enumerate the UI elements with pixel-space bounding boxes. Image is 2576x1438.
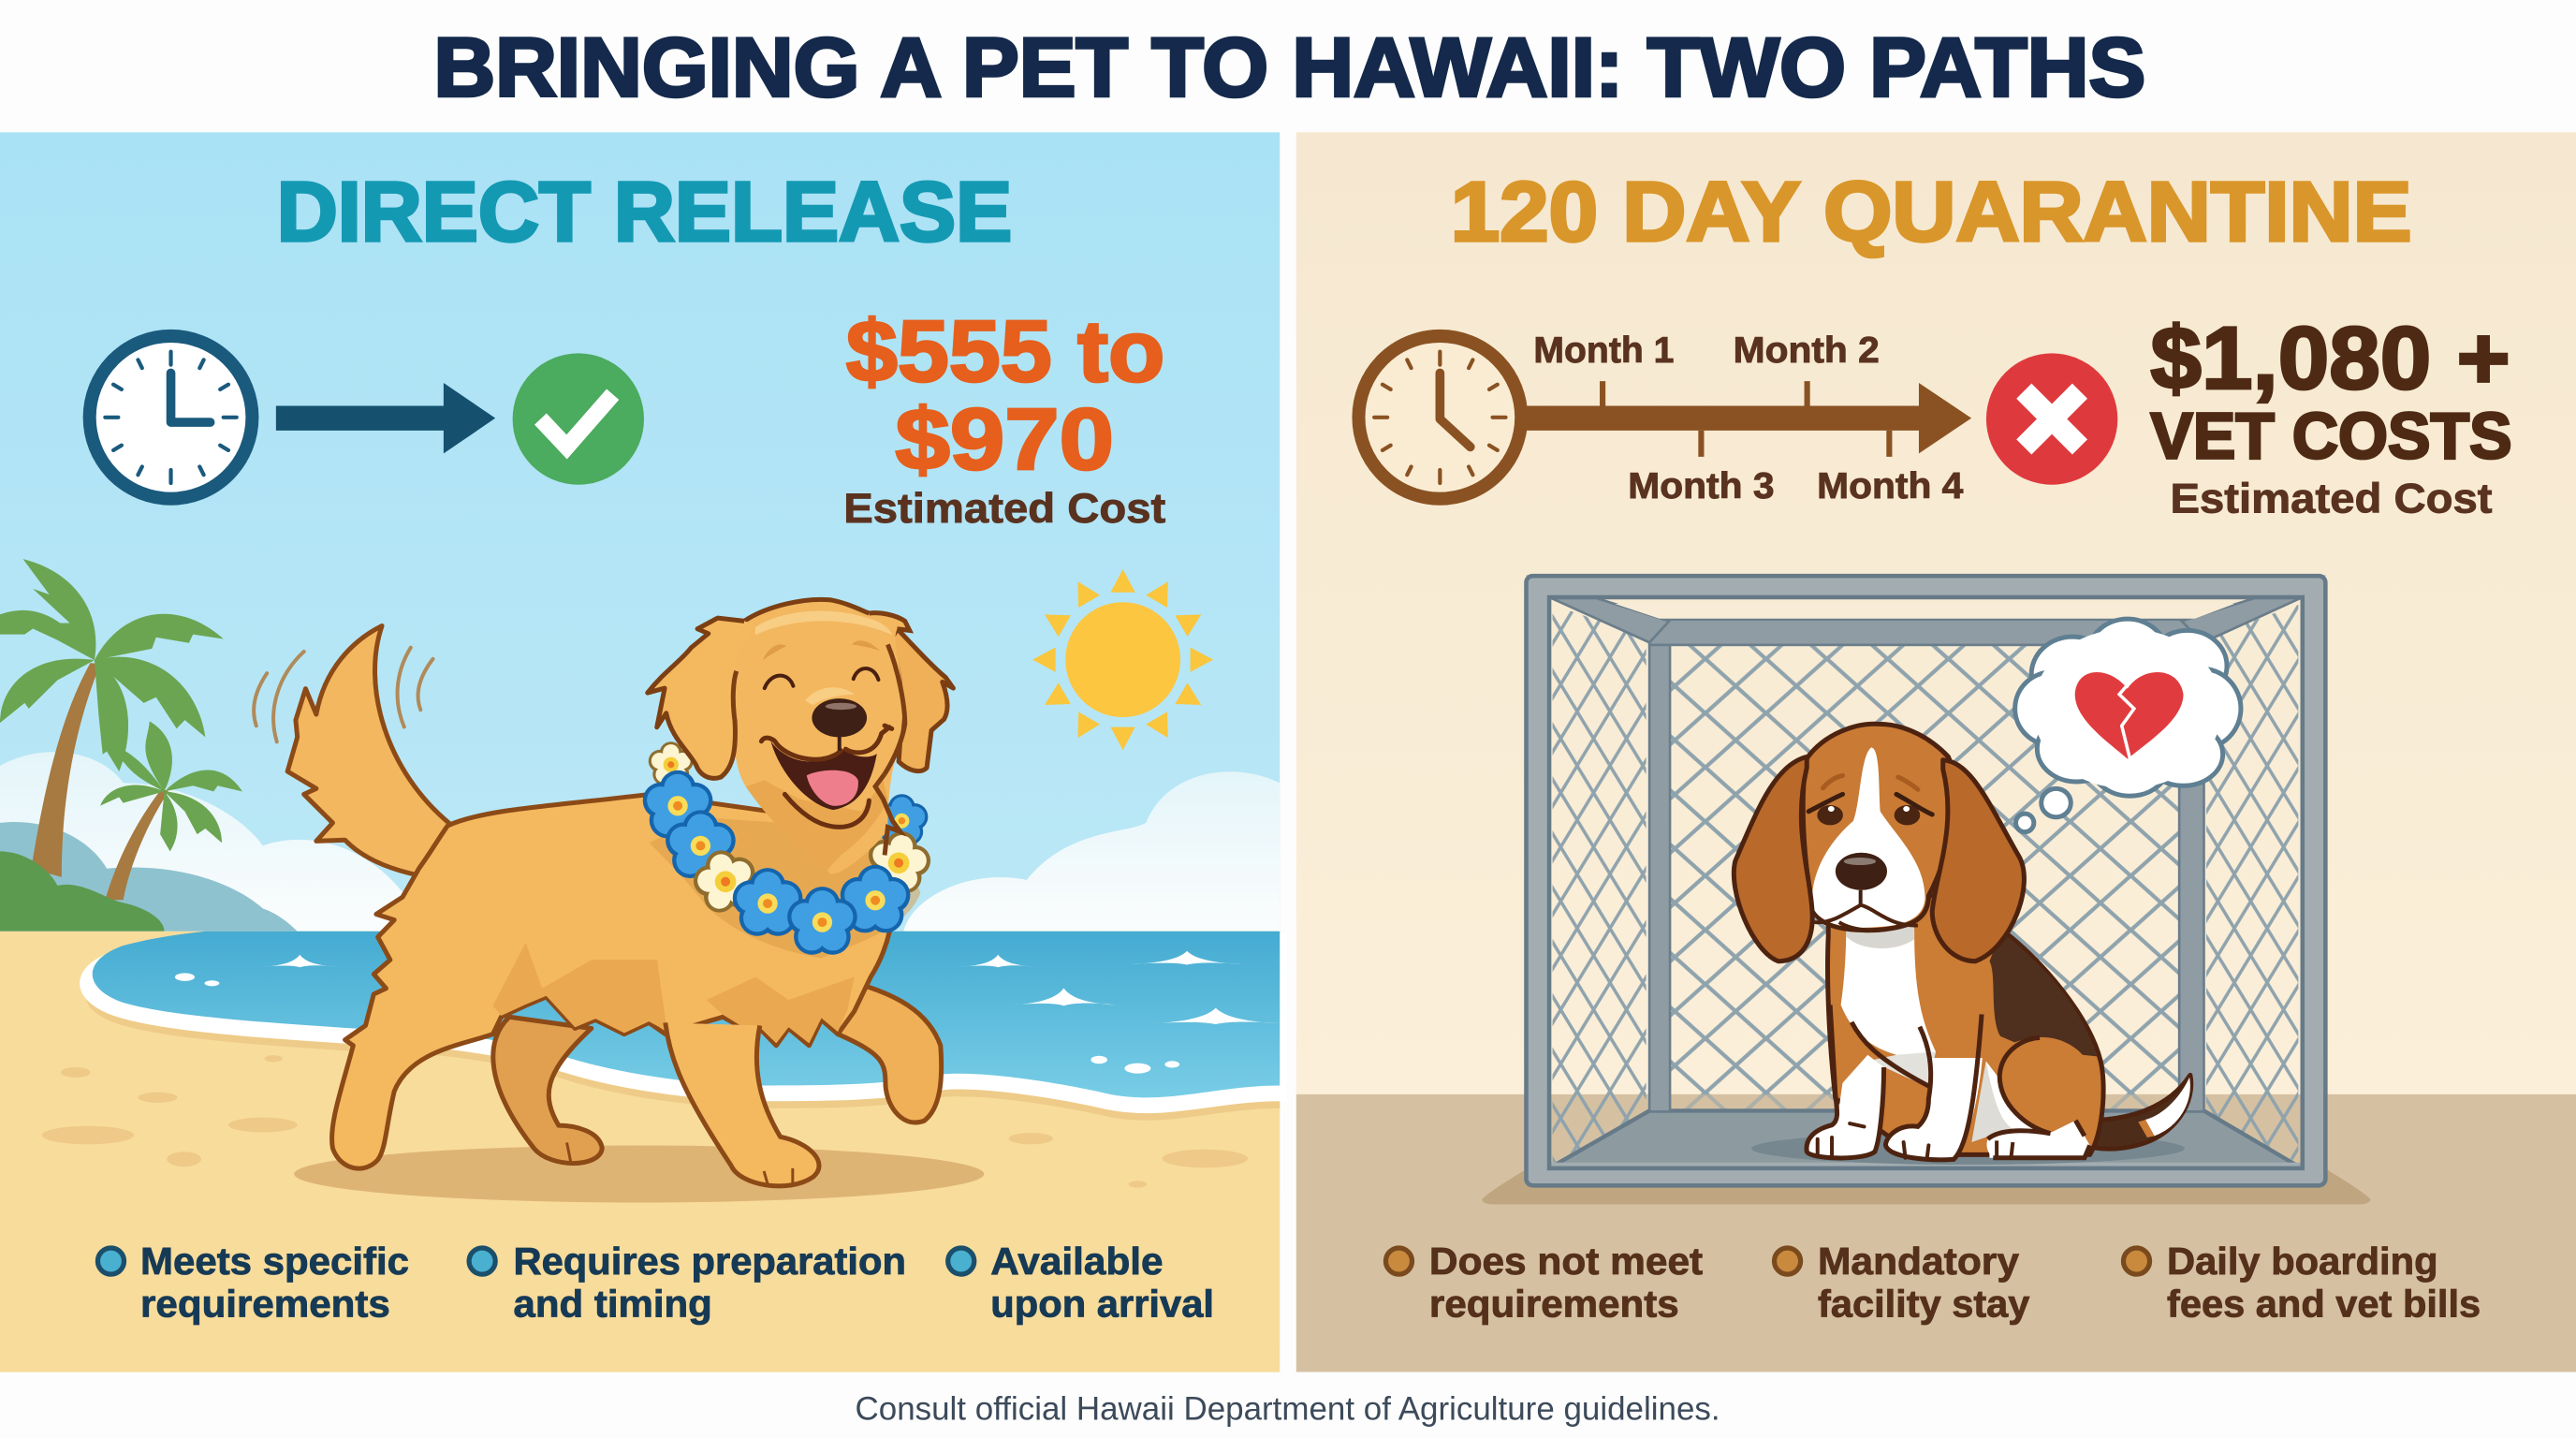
arrow <box>276 383 495 453</box>
bullet: requires preparation and timing: Requires preparation <box>513 1240 906 1283</box>
panel: direct release <box>0 132 1282 1372</box>
bullet: mandatory facility stay: facility stay <box>1818 1283 2030 1326</box>
bullet: available upon arrival: Available <box>990 1240 1164 1283</box>
kennel cage <box>1482 576 2371 1204</box>
cost: quarantine: Estimated Cost <box>2170 476 2493 522</box>
bullet: meets specific requirements: Meets specific <box>140 1240 409 1283</box>
timeline arrow: Month 3 <box>1628 466 1775 506</box>
panel: 120 day quarantine <box>1296 132 2576 1372</box>
timeline arrow <box>1525 330 1971 506</box>
cost: direct release: Estimated Cost <box>843 485 1165 532</box>
bullet: daily boarding fees and vet bills: Daily boarding <box>2167 1240 2438 1283</box>
icon: clock <box>1358 336 1521 499</box>
icon: clock <box>90 336 252 499</box>
thought bubble with broken heart <box>2015 619 2241 832</box>
bullet: mandatory facility stay <box>1775 1240 2030 1326</box>
bullet: meets specific requirements <box>97 1240 409 1326</box>
bullet: does not meet requirements <box>1385 1240 1703 1326</box>
head <box>1803 724 1954 931</box>
icon: red x <box>1986 353 2117 485</box>
cost: quarantine: $1,080 + <box>2150 309 2510 408</box>
bullet: requires preparation and timing <box>469 1240 906 1326</box>
bullet: daily boarding fees and vet bills <box>2123 1240 2481 1326</box>
icon: green check <box>513 353 644 485</box>
bullet: does not meet requirements: requirements <box>1429 1283 1679 1326</box>
timeline arrow: Month 4 <box>1817 466 1964 506</box>
bullet: does not meet requirements: Does not meet <box>1429 1240 1703 1283</box>
sad beagle <box>1734 724 2191 1165</box>
section heading: 120 day quarantine: 120 DAY QUARANTINE <box>1451 165 2411 259</box>
cost: quarantine <box>2150 309 2512 522</box>
icon: sun <box>1032 569 1213 750</box>
golden retriever with lei <box>254 599 953 1186</box>
bullet: requires preparation and timing: and timing <box>513 1283 712 1326</box>
cost: quarantine: VET COSTS <box>2150 400 2512 473</box>
bullet: daily boarding fees and vet bills: fees and vet bills <box>2167 1283 2481 1326</box>
head <box>648 599 953 874</box>
timeline arrow: Month 1 <box>1533 330 1674 371</box>
lei flowers <box>643 741 935 955</box>
footer note: Consult official Hawaii Department of Agriculture guidelines. <box>856 1390 1720 1427</box>
bullet: available upon arrival: upon arrival <box>990 1283 1214 1326</box>
cost: direct release: $555 to <box>846 302 1164 400</box>
beach scene background <box>0 559 1282 1372</box>
section heading: direct release: DIRECT RELEASE <box>277 165 1012 259</box>
timeline arrow: Month 2 <box>1734 330 1880 371</box>
tail <box>2086 1075 2191 1149</box>
cost: direct release: $970 <box>896 390 1114 488</box>
bullet: meets specific requirements: requirements <box>140 1283 390 1326</box>
title: BRINGING A PET TO HAWAII: TWO PATHS <box>433 21 2145 114</box>
bullet: available upon arrival <box>948 1240 1214 1326</box>
cost: direct release <box>843 302 1165 532</box>
bullet: mandatory facility stay: Mandatory <box>1818 1240 2020 1283</box>
